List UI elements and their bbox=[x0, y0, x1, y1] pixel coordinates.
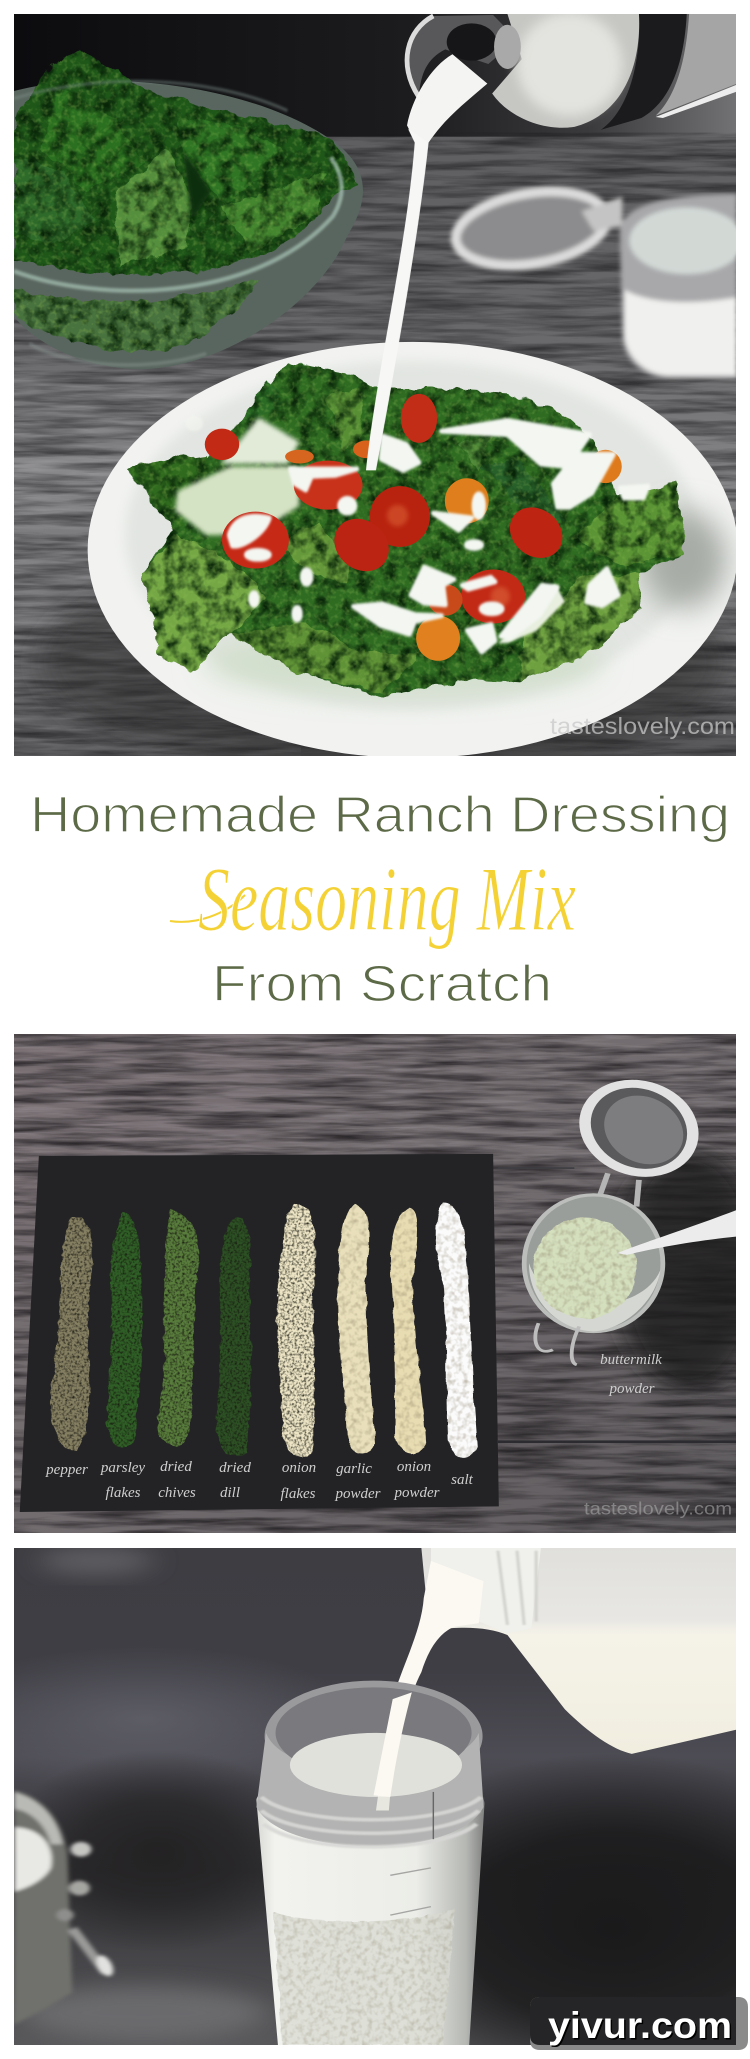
slate board bbox=[20, 1154, 499, 1512]
stream into liquid bbox=[374, 1692, 412, 1797]
ingredient labels: powder bbox=[394, 1485, 440, 1501]
ingredient labels: onion bbox=[282, 1460, 316, 1476]
ingredient labels: powder bbox=[608, 1381, 655, 1397]
jar of buttermilk powder bbox=[524, 1195, 663, 1365]
blender bottle bbox=[256, 1681, 484, 2045]
ingredient labels: garlic bbox=[336, 1461, 372, 1477]
measuring spoon bbox=[617, 1210, 737, 1255]
dressing bottle bbox=[407, 13, 737, 143]
ingredient labels: dried bbox=[219, 1460, 251, 1476]
watermark badge: yivur.com bbox=[530, 1997, 748, 2050]
dressing stream bbox=[366, 129, 429, 470]
white plate bbox=[88, 342, 738, 758]
title: from scratch: From Scratch bbox=[212, 955, 552, 1012]
ingredient labels: onion bbox=[397, 1459, 431, 1475]
glass bowl of lettuce bbox=[14, 49, 363, 369]
photo: buttermilk poured into bottle bbox=[14, 1548, 736, 2045]
watermark: top photo: tasteslovely.com bbox=[550, 713, 735, 739]
watermark badge: yivur.com: yivur.com bbox=[548, 2005, 732, 2046]
ranch dressing drizzle bbox=[188, 418, 648, 652]
ingredient labels: parsley bbox=[100, 1460, 145, 1476]
pale romaine pieces bbox=[175, 466, 299, 535]
table shadow below plate bbox=[39, 550, 727, 776]
blurred jar on left bbox=[14, 1790, 116, 2025]
ingredient labels: dried bbox=[160, 1459, 192, 1475]
ingredient labels: chives bbox=[158, 1485, 196, 1501]
photo: dressing poured over salad bbox=[14, 14, 736, 756]
jar of dressing and lid bbox=[450, 181, 744, 378]
ingredient labels: flakes bbox=[106, 1485, 141, 1501]
milk jug bbox=[421, 1548, 737, 1754]
ingredient labels: powder bbox=[334, 1486, 381, 1502]
ingredient labels: buttermilk bbox=[600, 1352, 662, 1368]
open jar lid bbox=[569, 1074, 709, 1207]
ingredient labels: salt bbox=[451, 1472, 474, 1488]
title: seasoning mix script bbox=[170, 848, 576, 950]
cherry tomatoes bbox=[205, 394, 622, 661]
photo: seasoning ingredients on slate bbox=[14, 1034, 736, 1533]
ingredient labels: pepper bbox=[45, 1462, 88, 1478]
ingredient labels: flakes bbox=[280, 1486, 316, 1502]
ingredient labels: dill bbox=[220, 1485, 240, 1501]
spice strips bbox=[50, 1203, 478, 1458]
salad leaves bbox=[125, 363, 684, 697]
ingredient labels bbox=[45, 1352, 662, 1502]
title: homemade ranch dressing: Homemade Ranch Dressing bbox=[30, 786, 730, 843]
milk stream bbox=[374, 1561, 484, 1797]
title: seasoning mix script: Seasoning Mix bbox=[198, 848, 576, 950]
watermark badge: yivur.com: yivur.com bbox=[550, 2006, 734, 2048]
